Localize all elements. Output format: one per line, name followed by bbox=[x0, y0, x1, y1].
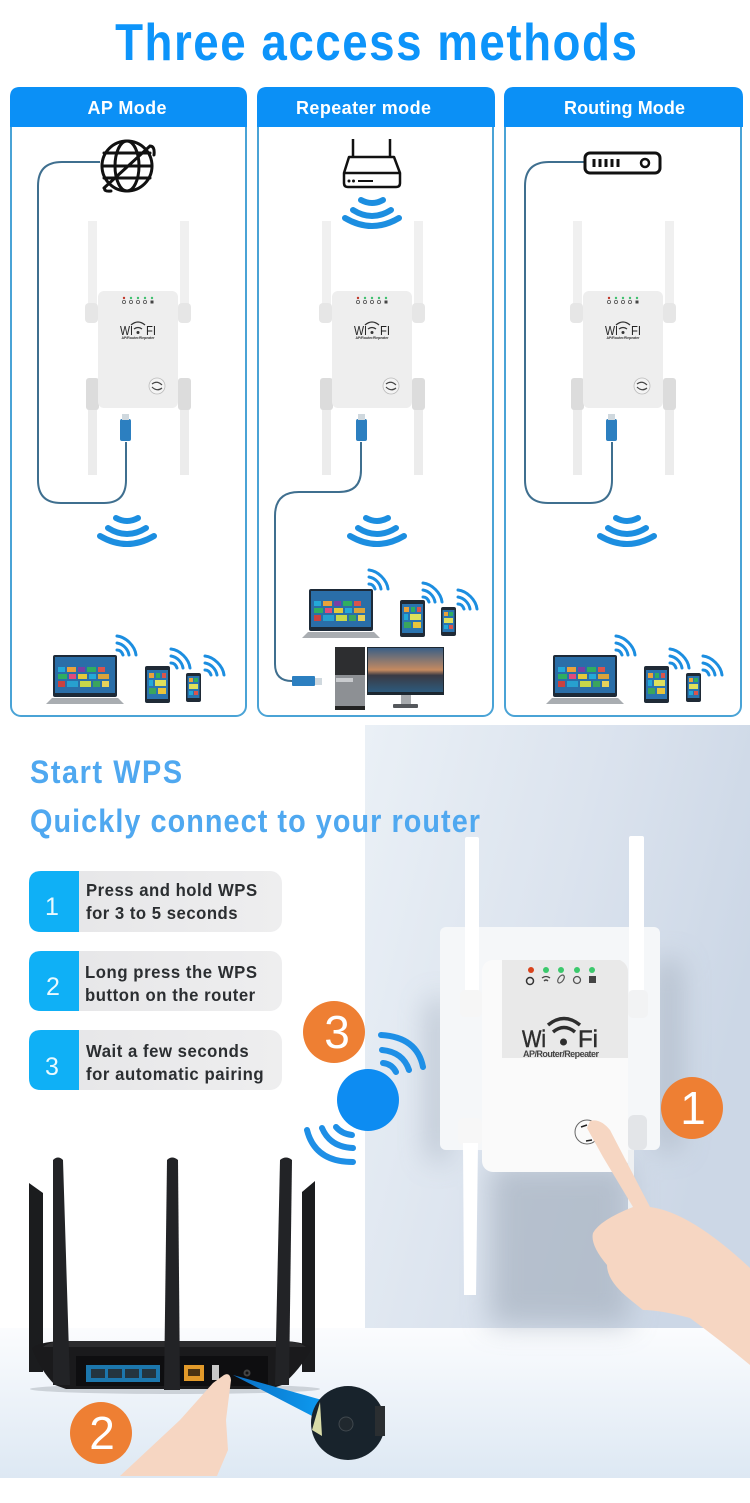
step 3: for automatic pairing bbox=[86, 1063, 264, 1084]
orange badge 2 bbox=[70, 1402, 132, 1464]
step 3: Wait a few seconds bbox=[86, 1040, 249, 1061]
device logo right: FI bbox=[146, 323, 156, 338]
step 1: 1 bbox=[45, 893, 59, 921]
device caption: AP/Router/Repeater bbox=[355, 336, 389, 340]
step 2: Long press the WPS bbox=[85, 961, 257, 982]
step 2 bbox=[29, 951, 282, 1011]
step 3 bbox=[29, 1030, 282, 1090]
icon: globe bbox=[102, 141, 154, 191]
callout: magnified button bbox=[311, 1386, 385, 1460]
heading: Quickly connect: Quickly connect to your router bbox=[30, 804, 480, 839]
wifi signal bbox=[100, 518, 154, 544]
orange badge 3: 3 bbox=[324, 1006, 350, 1058]
ethernet connector bbox=[120, 414, 131, 441]
devices bbox=[46, 636, 224, 704]
panel header: Repeater mode bbox=[257, 87, 495, 127]
usb plug bbox=[292, 676, 322, 686]
device caption: AP/Router/Repeater bbox=[121, 336, 155, 340]
background wall and floor bbox=[0, 725, 750, 1478]
heading: AP Mode: AP Mode bbox=[88, 98, 166, 118]
step 2: 2 bbox=[46, 973, 60, 1001]
device logo left: WI bbox=[354, 323, 367, 338]
orange badge 2: 2 bbox=[89, 1407, 115, 1459]
device logo left: WI bbox=[605, 323, 618, 338]
wifi signal bbox=[350, 518, 404, 544]
devices bbox=[546, 636, 722, 704]
heading: Routing Mode: Routing Mode bbox=[564, 98, 685, 118]
wifi signal bbox=[600, 518, 654, 544]
panel: Routing Mode bbox=[504, 87, 743, 716]
black router bbox=[29, 1158, 320, 1394]
title: Three access methods bbox=[115, 14, 637, 72]
cable bbox=[525, 162, 612, 503]
large wifi extender bbox=[428, 836, 681, 1325]
icon: modem bbox=[585, 153, 660, 173]
WPS pairing signal bbox=[307, 1035, 423, 1162]
panel: AP mode bbox=[10, 87, 247, 716]
hand pressing WPS bbox=[587, 1120, 750, 1365]
step 3: 3 bbox=[45, 1053, 59, 1081]
device caption: AP/Router/Repeater bbox=[606, 336, 640, 340]
orange badge 1: 1 bbox=[680, 1082, 706, 1134]
wifi arcs bbox=[548, 1018, 580, 1046]
heading: Repeater mode: Repeater mode bbox=[296, 98, 431, 118]
panel header: Routing Mode bbox=[504, 87, 743, 127]
router device bbox=[319, 221, 425, 475]
device logo right: FI bbox=[380, 323, 390, 338]
status lights bbox=[526, 967, 596, 984]
orange badge 3 bbox=[303, 1001, 365, 1063]
desktop computer bbox=[335, 647, 444, 710]
devices bbox=[302, 570, 477, 638]
cable bbox=[275, 442, 361, 681]
device logo right: FI bbox=[631, 323, 641, 338]
router device bbox=[570, 221, 676, 475]
step 1 bbox=[29, 871, 282, 932]
WPS button bbox=[575, 1120, 599, 1144]
caption: AP/Router/Repeater bbox=[523, 1049, 599, 1059]
router device bbox=[85, 221, 191, 475]
step 1: for 3 to 5 seconds bbox=[86, 902, 238, 923]
callout: blue wedge bbox=[233, 1375, 322, 1418]
step 1: Press and hold WPS bbox=[86, 879, 257, 900]
icon: router bbox=[344, 139, 400, 187]
cable bbox=[38, 162, 126, 503]
orange badge 1 bbox=[661, 1077, 723, 1139]
wifi logo left: Wi bbox=[522, 1026, 546, 1053]
heading: Start WPS: Start WPS bbox=[30, 755, 182, 790]
step 2: button on the router bbox=[85, 984, 255, 1005]
wall shadows bbox=[428, 960, 681, 1325]
wifi logo right: Fi bbox=[578, 1026, 598, 1053]
hand pressing router button bbox=[120, 1374, 231, 1476]
ethernet connector bbox=[606, 414, 617, 441]
wifi signal from router bbox=[345, 200, 399, 226]
panel: Repeater mode bbox=[257, 87, 495, 716]
panel header: AP Mode bbox=[10, 87, 247, 127]
device logo left: WI bbox=[120, 323, 133, 338]
ethernet connector bbox=[356, 414, 367, 441]
